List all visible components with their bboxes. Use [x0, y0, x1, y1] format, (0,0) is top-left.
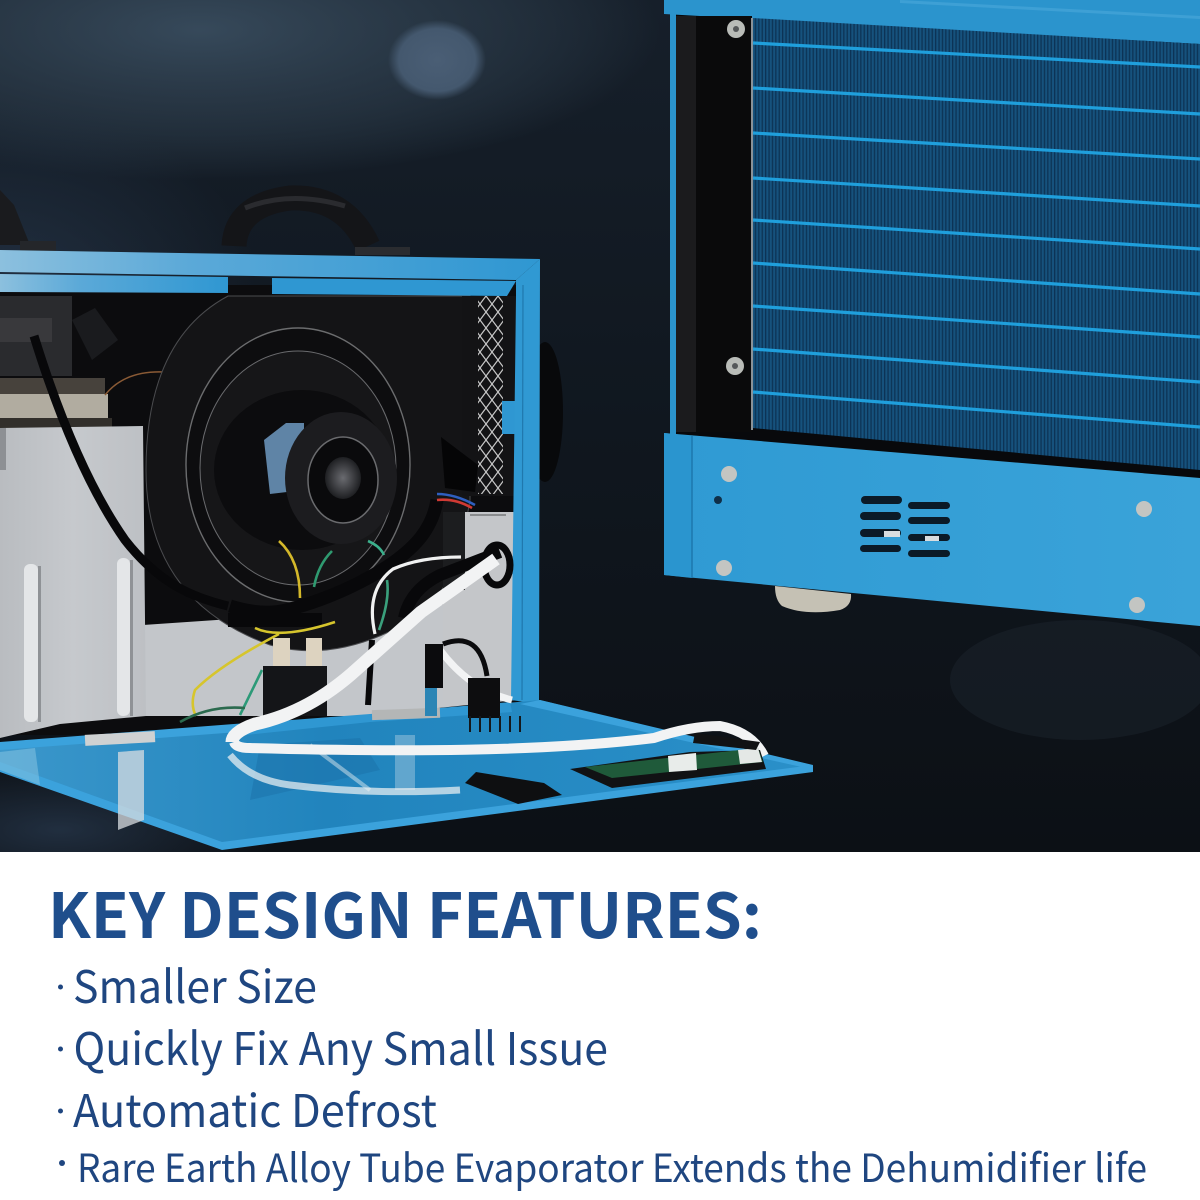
left mechanism: [0, 296, 165, 428]
unit: left open cabinet: [0, 190, 813, 850]
black gasket: [676, 16, 696, 432]
bullet: evaporator: Rare Earth Alloy Tube Evaporator Extends the Dehumidifier life: [77, 1138, 1147, 1194]
unit: right dehumidifier: [664, 0, 1200, 626]
evaporator coil: [753, 18, 1200, 470]
capacitor: [263, 638, 327, 716]
wire mesh filter: [462, 296, 516, 496]
door rim: [0, 762, 813, 850]
ribbon cables: [230, 559, 764, 792]
black wedge: [441, 437, 478, 492]
heading: KEY DESIGN FEATURES:: [48, 866, 762, 956]
background: [0, 0, 1200, 900]
blower fan: [146, 296, 470, 651]
bullet: automatic defrost: Automatic Defrost: [73, 1075, 437, 1140]
silver compressor housing: [0, 426, 146, 738]
carrying handles: [0, 190, 410, 255]
blue bracket: [502, 401, 520, 434]
rear disc: [527, 342, 563, 482]
feature list: [58, 951, 1147, 1194]
black latch: [465, 772, 562, 804]
coloured wires: [180, 494, 475, 722]
panel screws: [716, 466, 1152, 613]
reflections: [118, 750, 144, 830]
white text area: [0, 852, 1200, 1200]
foot: [775, 586, 851, 612]
blue frame: [0, 250, 540, 704]
hinges: [85, 731, 155, 746]
motor label: [264, 423, 304, 494]
lower blue panel: [664, 433, 1200, 626]
motor hub: [285, 412, 397, 544]
silver lower plate: [143, 600, 516, 716]
control circuit board: [570, 733, 766, 788]
door panel: [0, 700, 813, 850]
bullet: quick fix: Quickly Fix Any Small Issue: [74, 1013, 608, 1078]
control box: [443, 512, 517, 700]
vent slots: [860, 496, 950, 557]
top blue rail: [664, 0, 1200, 44]
gasket screws: [726, 20, 745, 375]
dark interior: [0, 285, 518, 735]
connector and plug: [425, 641, 520, 732]
bullet: smaller size: Smaller Size: [73, 951, 317, 1016]
hinge bar: [0, 722, 265, 750]
background light spot: [388, 20, 486, 100]
photo: dehumidifier with open service panel: [0, 0, 1200, 900]
black cables: [34, 336, 510, 705]
